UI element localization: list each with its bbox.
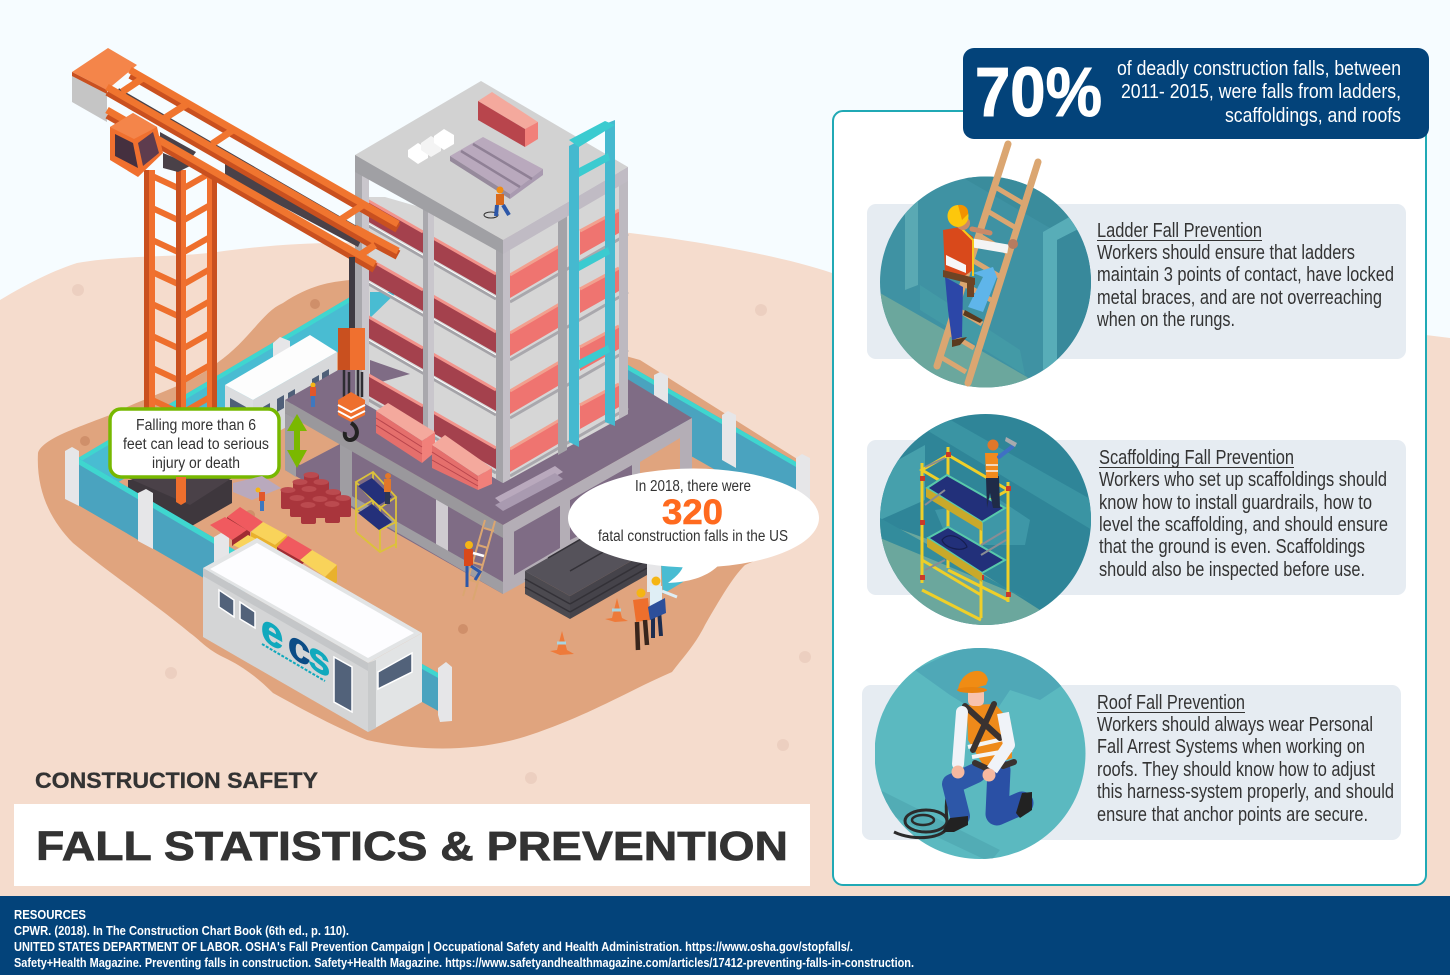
callout: falling more than 6 feet: injury or death	[152, 455, 240, 472]
resources footer: UNITED STATES DEPARTMENT OF LABOR. OSHA's Fall Prevention Campaign | Occupational Safety and Health Administration. https://www.osha.gov/stopfalls/.	[14, 940, 853, 954]
title banner	[14, 804, 810, 886]
70 percent banner: of deadly construction falls, between	[1117, 58, 1401, 80]
lilac beams on ground	[233, 476, 281, 500]
brick piles on platform	[376, 403, 492, 490]
callout: falling more than 6 feet	[110, 409, 279, 477]
red wall panels on left face	[367, 200, 496, 469]
scaffolding body text: know how to install guardrails, how to	[1099, 492, 1372, 514]
roof materials	[408, 92, 543, 199]
scaffolding body text: should also be inspected before use.	[1099, 559, 1365, 581]
scaffold circle illustration	[880, 414, 1092, 626]
ladder body text: maintain 3 points of contact, have locked	[1097, 264, 1394, 286]
scaffolding body text	[1099, 469, 1388, 581]
prevention panel	[833, 111, 1426, 885]
resources footer: CPWR. (2018). In The Construction Chart Book (6th ed., p. 110).	[14, 924, 349, 938]
roof body text: Fall Arrest Systems when working on	[1097, 736, 1365, 758]
dark steel beams	[525, 514, 647, 619]
roof body text: ensure that anchor points are secure.	[1097, 804, 1368, 826]
back fence	[78, 297, 810, 520]
building	[355, 81, 628, 483]
roof body text: Workers should always wear Personal	[1097, 714, 1373, 736]
crane jib	[72, 48, 398, 268]
right face interior	[503, 167, 628, 483]
scaffolding heading: Scaffolding Fall Prevention	[1099, 447, 1294, 469]
resources footer: Safety+Health Magazine. Preventing falls in construction. Safety+Health Magazine. https://www.safetyandhealthmagazine.com/articles/17412-preventing-falls-in-construction.	[14, 956, 914, 970]
two engineers	[633, 576, 677, 650]
traffic cones	[550, 598, 628, 655]
subtitle: CONSTRUCTION SAFETY	[35, 768, 318, 793]
crane hook and block	[338, 257, 365, 440]
salmon wall panels on right face	[510, 210, 619, 472]
roof heading: Roof Fall Prevention	[1097, 692, 1245, 714]
70 percent banner: scaffoldings, and roofs	[1225, 105, 1401, 127]
speech bubble: 320 fatal falls: In 2018, there were	[635, 478, 751, 495]
building ground storey	[285, 400, 692, 594]
brick and tile stacks	[210, 507, 337, 592]
tower base	[128, 478, 232, 527]
ecs logo: s	[308, 631, 330, 688]
office trailer behind building	[225, 335, 337, 445]
card: scaffolding fall prevention	[867, 414, 1406, 626]
title banner: FALL STATISTICS & PREVENTION	[36, 823, 788, 869]
ladder body text: Workers should ensure that ladders	[1097, 242, 1355, 264]
speech bubble: 320 fatal falls: fatal construction falls in the US	[598, 528, 788, 545]
card: roof fall prevention	[862, 648, 1401, 862]
operator cab	[110, 113, 163, 177]
roof body text: roofs. They should know how to adjust	[1097, 759, 1375, 781]
ecs logo	[261, 604, 330, 688]
ecs logo: e	[261, 604, 283, 661]
scaffolding body text: Workers who set up scaffoldings should	[1099, 469, 1387, 491]
callout: falling more than 6 feet: feet can lead to serious	[123, 436, 269, 453]
front right fence piece behind engineers	[647, 562, 690, 594]
sand ground background	[0, 230, 1450, 896]
red barrels	[280, 472, 351, 524]
70 percent banner	[963, 48, 1429, 139]
worker kneeling on roof	[484, 186, 509, 218]
left face interior	[355, 155, 503, 483]
ladder body text: metal braces, and are not overreaching	[1097, 287, 1382, 309]
counterweight	[72, 72, 107, 122]
site office container with ecs logo	[203, 538, 422, 732]
ladder worker on building	[463, 520, 495, 600]
ground worker	[256, 488, 265, 511]
columns	[355, 155, 362, 402]
speech bubble: 320 fatal falls	[568, 468, 819, 583]
worker on platform	[310, 382, 316, 407]
callout: falling more than 6 feet: Falling more than 6	[136, 417, 256, 434]
front fence end	[415, 660, 452, 722]
roof circle illustration	[875, 648, 1087, 862]
card: ladder fall prevention	[867, 144, 1406, 390]
blue scaffold tower on building	[569, 120, 615, 447]
ladder heading: Ladder Fall Prevention	[1097, 220, 1262, 242]
70 percent banner: 2011- 2015, were falls from ladders,	[1121, 81, 1401, 103]
roof slab	[355, 81, 628, 240]
roof body text	[1097, 714, 1394, 826]
small scaffold	[356, 472, 396, 552]
ladder body text: when on the rungs.	[1096, 309, 1235, 331]
kneeling worker	[894, 671, 1032, 838]
scaffolding body text: that the ground is even. Scaffoldings	[1099, 536, 1365, 558]
concrete platform	[285, 290, 692, 538]
speech bubble: 320 fatal falls: 320	[662, 493, 723, 532]
lilac beams on platform	[495, 466, 563, 511]
green height arrow	[287, 414, 307, 468]
crane tower	[128, 170, 232, 527]
construction site ground	[38, 280, 805, 748]
70 percent banner: 70%	[975, 53, 1102, 131]
ladder body text	[1096, 242, 1394, 331]
front left fence	[65, 447, 245, 602]
scaffolding body text: level the scaffolding, and should ensure	[1099, 514, 1388, 536]
resources footer: RESOURCES	[14, 908, 86, 922]
ladder circle illustration	[880, 144, 1092, 390]
roof body text: this harness-system properly, and should	[1097, 781, 1394, 803]
resources footer	[0, 896, 1450, 975]
crane post base orange foot	[176, 477, 186, 505]
ecs logo: c	[288, 620, 310, 677]
